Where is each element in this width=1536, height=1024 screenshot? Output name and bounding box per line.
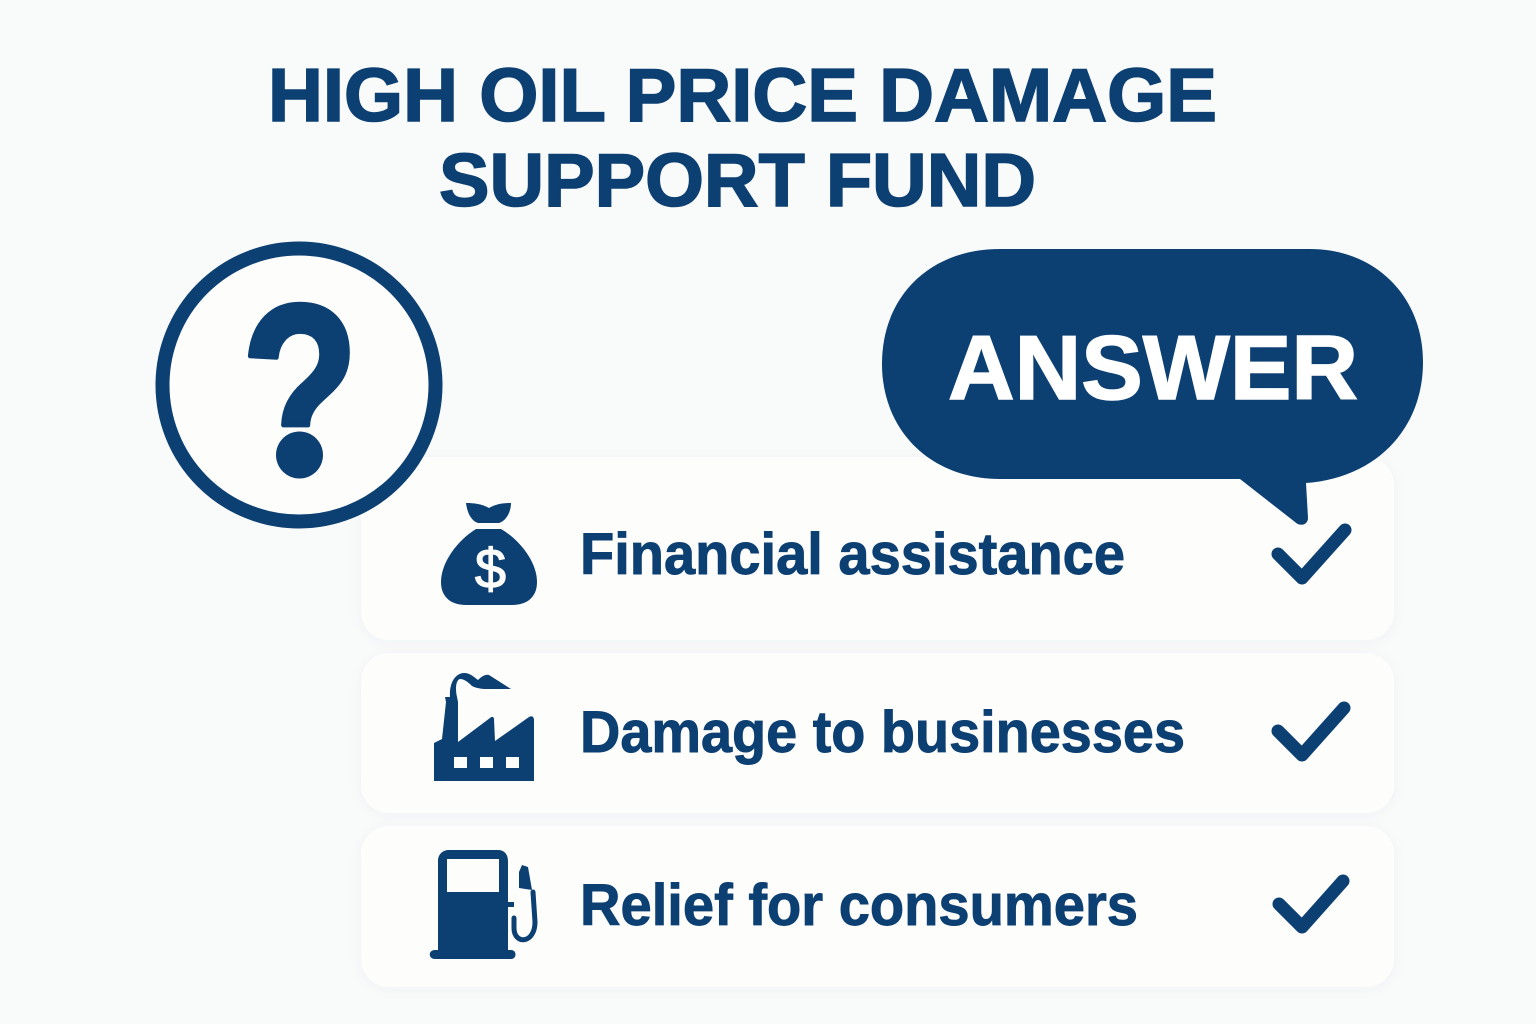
title: SUPPORT FUND	[439, 138, 1036, 222]
question mark circle: ?	[241, 254, 359, 529]
title: HIGH OIL PRICE DAMAGE	[268, 53, 1217, 137]
icon: check	[1278, 708, 1344, 755]
icon: check	[1279, 881, 1343, 927]
title	[268, 53, 1217, 222]
label: relief for consumers: Relief for consumers	[580, 873, 1138, 938]
icon: money bag: $	[475, 537, 506, 600]
panel: damage to businesses	[361, 653, 1394, 813]
answer speech bubble: ANSWER	[948, 318, 1358, 419]
label: damage to businesses: Damage to businesses	[580, 700, 1185, 765]
panel: relief for consumers	[361, 826, 1394, 987]
icon: fuel pump	[430, 850, 535, 959]
label: financial assistance: Financial assistance	[580, 522, 1125, 587]
icon: factory	[434, 673, 534, 781]
icon: money bag	[441, 503, 537, 605]
question mark circle	[162, 248, 436, 529]
panel: financial assistance	[361, 457, 1394, 640]
icon: check	[1278, 530, 1345, 578]
answer speech bubble	[882, 249, 1423, 525]
